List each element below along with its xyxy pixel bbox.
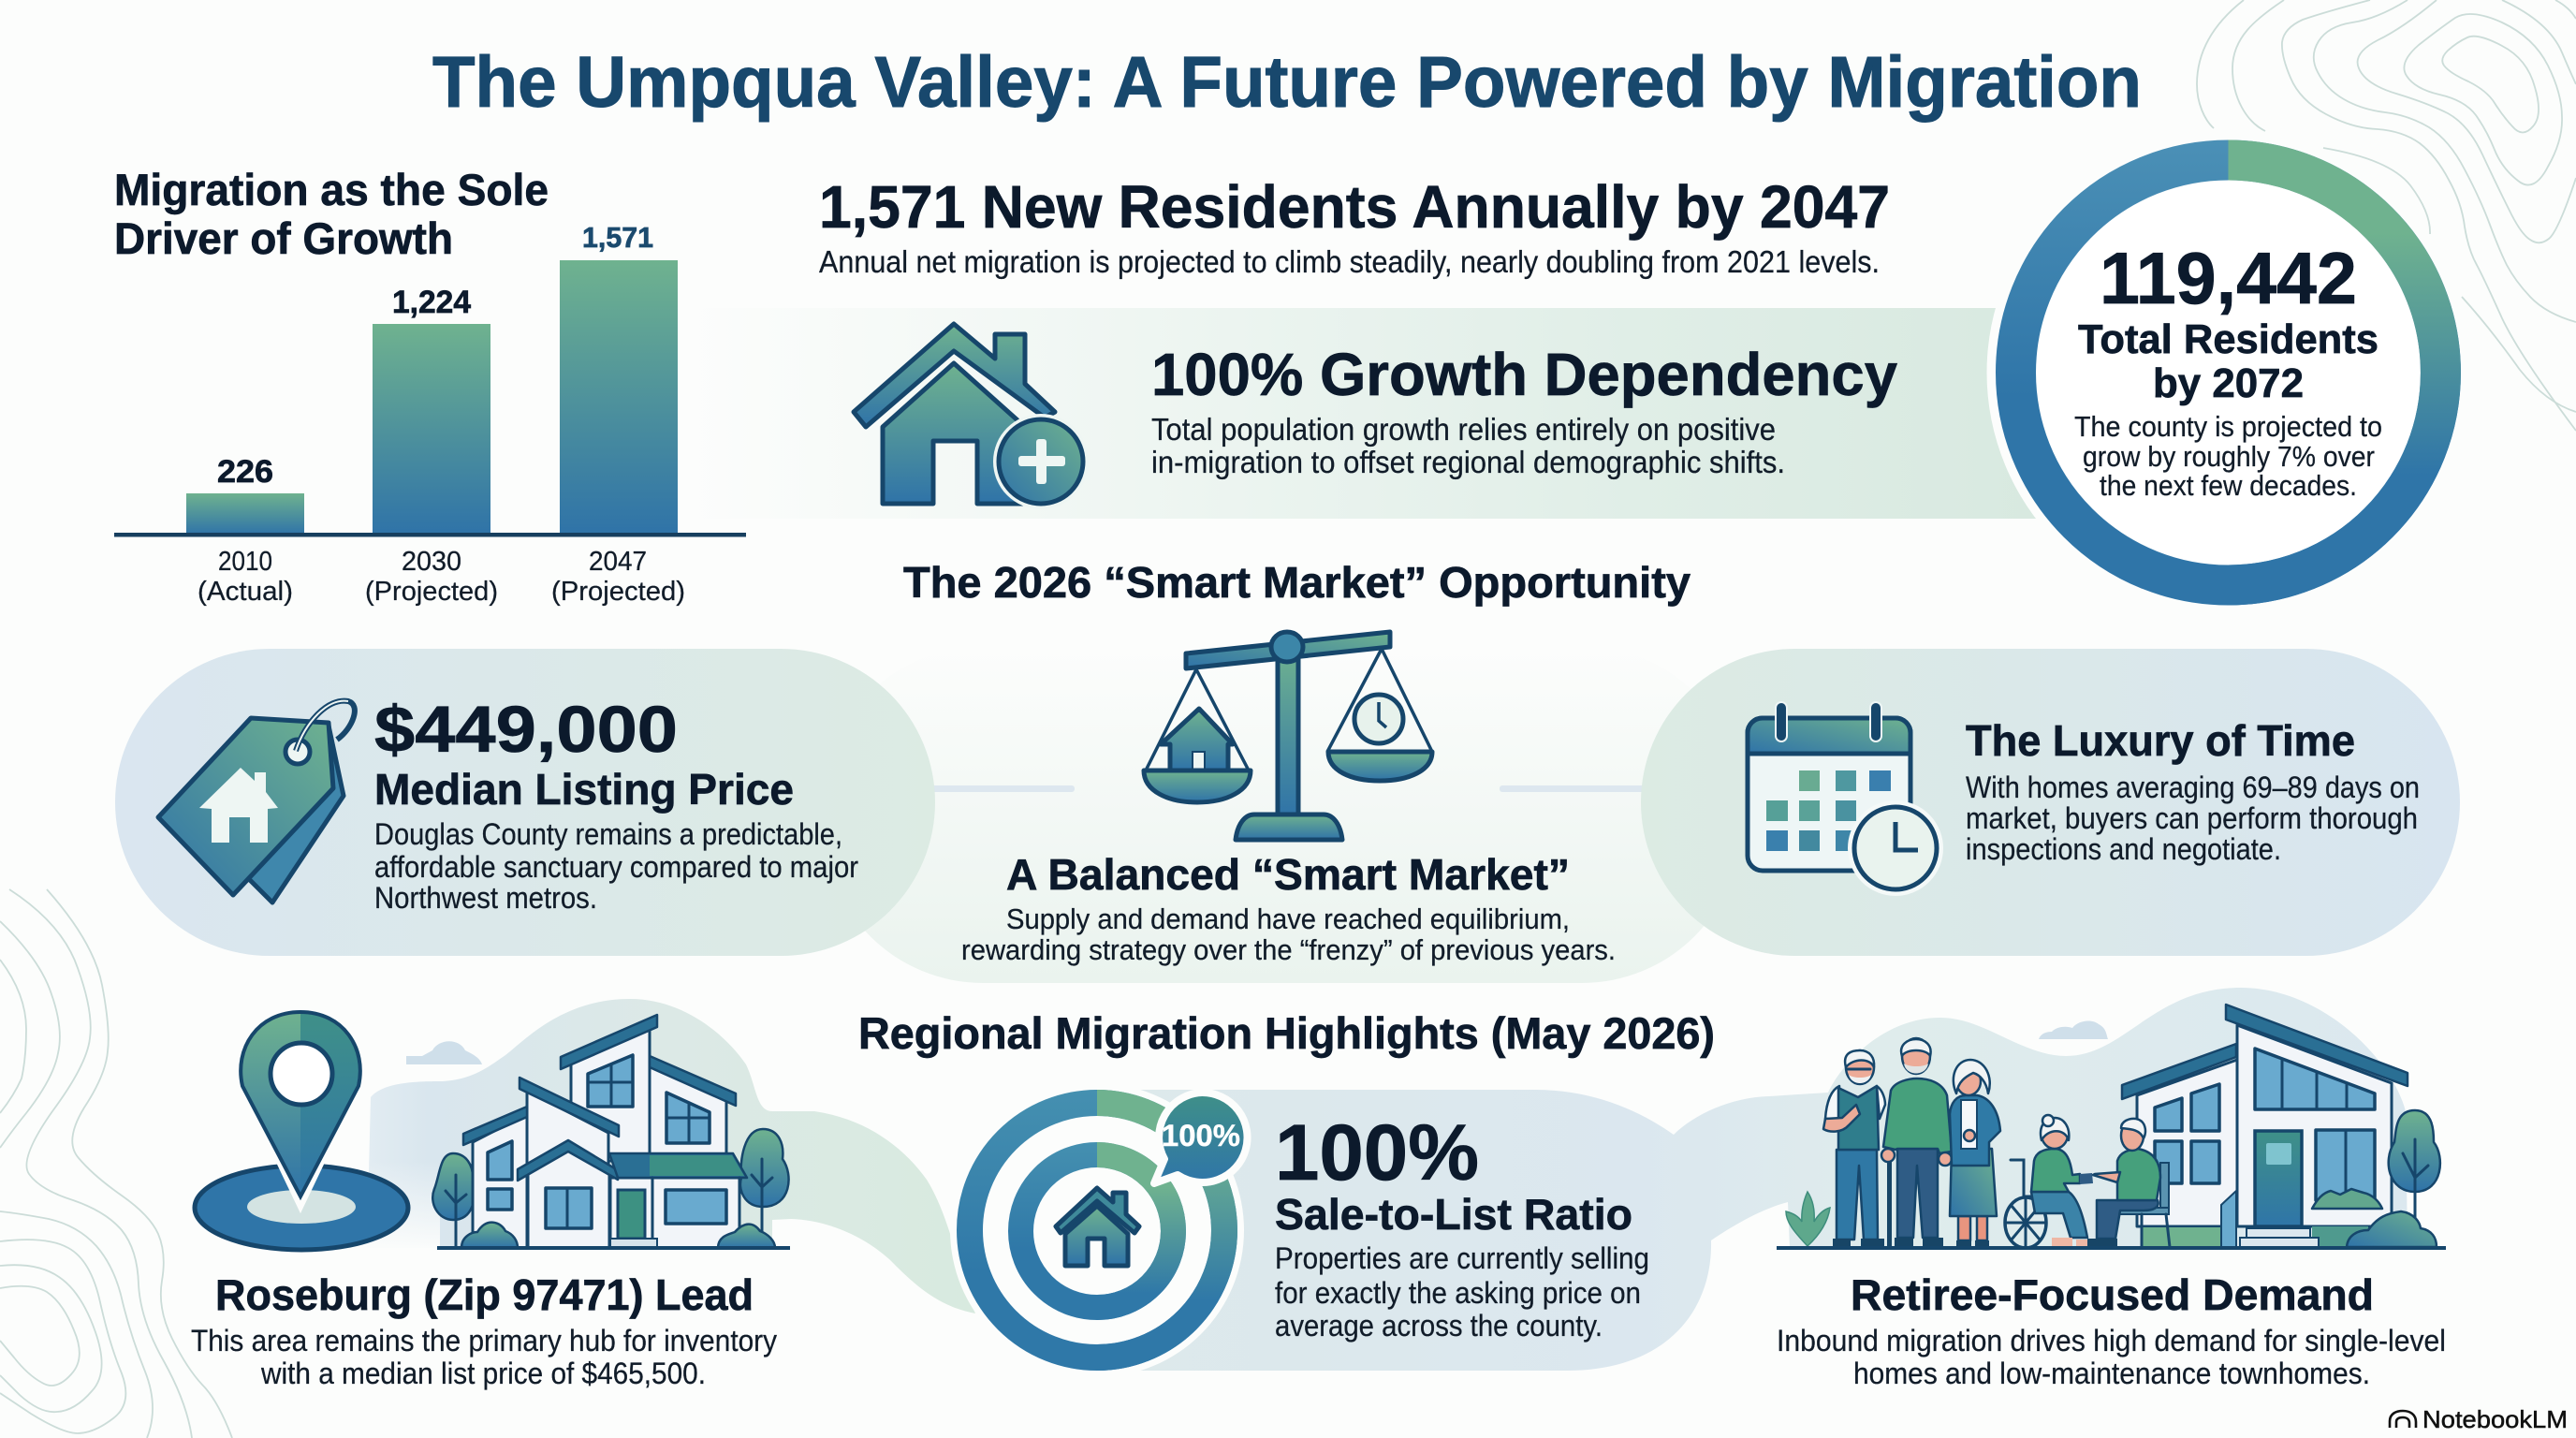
donut text: The county is projected to (2074, 410, 2382, 443)
topographic contours: top right (2197, 0, 2576, 431)
scene: retiree-focused demand (1777, 1005, 2446, 1390)
sale-to-list text: average across the county. (1275, 1309, 1603, 1343)
sale-to-list text: Properties are currently selling (1275, 1241, 1649, 1275)
icon: balance scale (1144, 632, 1432, 840)
retiree text (1777, 1270, 2446, 1390)
headline: new residents (819, 173, 1890, 279)
Roseburg text: This area remains the primary hub for inventory (191, 1324, 777, 1357)
illustration: modern house (2122, 1005, 2440, 1248)
bar chart: migration as the sole driver of growth (114, 165, 746, 607)
headline: new residents: 1,571 New Residents Annually by 2047 (819, 173, 1890, 241)
chart heading: Driver of Growth (114, 213, 453, 263)
luxury text: The Luxury of Time (1966, 716, 2355, 765)
panel: the luxury of time (1641, 649, 2460, 956)
chart heading: Migration as the Sole (114, 165, 549, 214)
year labels: 2047 (589, 547, 647, 577)
headline: new residents: Annual net migration is projected to climb steadily, nearly doubling from 2021 levels. (819, 244, 1880, 279)
luxury text: inspections and negotiate. (1966, 832, 2281, 866)
luxury text: With homes averaging 69–89 days on (1966, 770, 2420, 804)
dependency text: in-migration to offset regional demographic shifts. (1151, 445, 1785, 479)
year labels: (Actual) (198, 577, 293, 607)
Roseburg text (191, 1270, 777, 1390)
year labels: 2030 (402, 547, 461, 577)
illustration: standing woman (1950, 1060, 2000, 1248)
bar: 2047 (560, 260, 678, 535)
icon: cloud (2039, 1021, 2108, 1039)
icon: plant (1786, 1192, 1830, 1246)
icon: map pin (195, 1010, 408, 1250)
smart market text: rewarding strategy over the “frenzy” of previous years. (961, 933, 1616, 966)
icon: calendar with clock (1748, 702, 1938, 890)
dependency text: Total population growth relies entirely on positive (1151, 412, 1776, 447)
sale-to-list text: Sale-to-List Ratio (1275, 1190, 1632, 1239)
smart market text: Supply and demand have reached equilibrium, (1006, 902, 1570, 935)
value labels: 1,224 (392, 285, 471, 320)
title: The Umpqua Valley: A Future Powered by Migration (432, 42, 2142, 123)
icon: price tag (158, 701, 355, 902)
axis (114, 533, 746, 537)
illustration: woman in wheelchair (2005, 1115, 2097, 1248)
year labels: (Projected) (551, 577, 685, 607)
callout: 100% bubble: 100% (1162, 1119, 1240, 1152)
donut text: the next few decades. (2100, 469, 2357, 502)
dependency text (1151, 412, 1785, 479)
ground line (1777, 1246, 2446, 1250)
donut text (2074, 237, 2382, 502)
logo: NotebookLM: NotebookLM (2422, 1405, 2568, 1433)
donut text: by 2072 (2153, 360, 2304, 406)
price text: affordable sanctuary compared to major (374, 850, 858, 884)
panel: growth dependency band (683, 308, 2041, 519)
panel: median listing price (115, 649, 935, 956)
callout: 100% bubble (1154, 1093, 1248, 1183)
year labels (198, 547, 685, 607)
icon: cloud (406, 1041, 482, 1064)
section heading: smart market: The 2026 “Smart Market” Opportunity (903, 558, 1690, 607)
panel: sale-to-list ratio (950, 1083, 1649, 1377)
price text: $449,000 (374, 693, 678, 766)
section heading: regional highlights: Regional Migration Highlights (May 2026) (858, 1008, 1715, 1058)
donut: total residents by 2072 (1986, 131, 2469, 614)
Roseburg text: with a median list price of $465,500. (260, 1357, 706, 1390)
illustration: seated man (2087, 1119, 2170, 1247)
year labels: (Projected) (365, 577, 498, 607)
luxury text (1966, 716, 2420, 866)
chart heading (114, 165, 549, 263)
background blob: sale-to-list and retiree scene (1123, 988, 2408, 1371)
background blob: Roseburg scene (367, 999, 975, 1313)
topographic contours: bottom left (0, 889, 232, 1438)
value labels (217, 221, 653, 490)
year labels: 2010 (218, 547, 272, 577)
value labels: 1,571 (582, 221, 653, 254)
sale-to-list text: 100% (1275, 1108, 1479, 1196)
Roseburg text: Roseburg (Zip 97471) Lead (215, 1270, 754, 1319)
scene: Roseburg (191, 1010, 790, 1390)
dependency heading: 100% Growth Dependency (1151, 341, 1897, 408)
donut text: grow by roughly 7% over (2083, 440, 2375, 473)
panel: balanced smart market (824, 632, 1741, 983)
luxury text: market, buyers can perform thorough (1966, 801, 2418, 835)
price text (374, 693, 858, 915)
icon: house with plus (854, 324, 1089, 509)
connectors (931, 785, 1645, 792)
smart market heading: A Balanced “Smart Market” (1006, 850, 1570, 899)
bar: 2010 (186, 493, 304, 535)
sale-to-list text: for exactly the asking price on (1275, 1276, 1641, 1310)
retiree text: Retiree-Focused Demand (1851, 1270, 2374, 1319)
bar: 2030 (373, 324, 490, 535)
icon: target with house (950, 1083, 1244, 1377)
illustration: house (432, 1015, 790, 1250)
smart market text (961, 902, 1616, 966)
sale-to-list text (1275, 1108, 1649, 1343)
value labels: 226 (217, 454, 273, 490)
price text: Douglas County remains a predictable, (374, 817, 842, 851)
retiree text: Inbound migration drives high demand for single-level (1777, 1324, 2446, 1357)
price text: Northwest metros. (374, 881, 597, 915)
illustration: standing man with glasses (1823, 1050, 1885, 1247)
retiree text: homes and low-maintenance townhomes. (1853, 1357, 2370, 1390)
illustration: man with cane (1881, 1038, 1952, 1247)
price text: Median Listing Price (374, 765, 794, 814)
donut text: 119,442 (2100, 237, 2357, 319)
donut text: Total Residents (2078, 316, 2378, 362)
